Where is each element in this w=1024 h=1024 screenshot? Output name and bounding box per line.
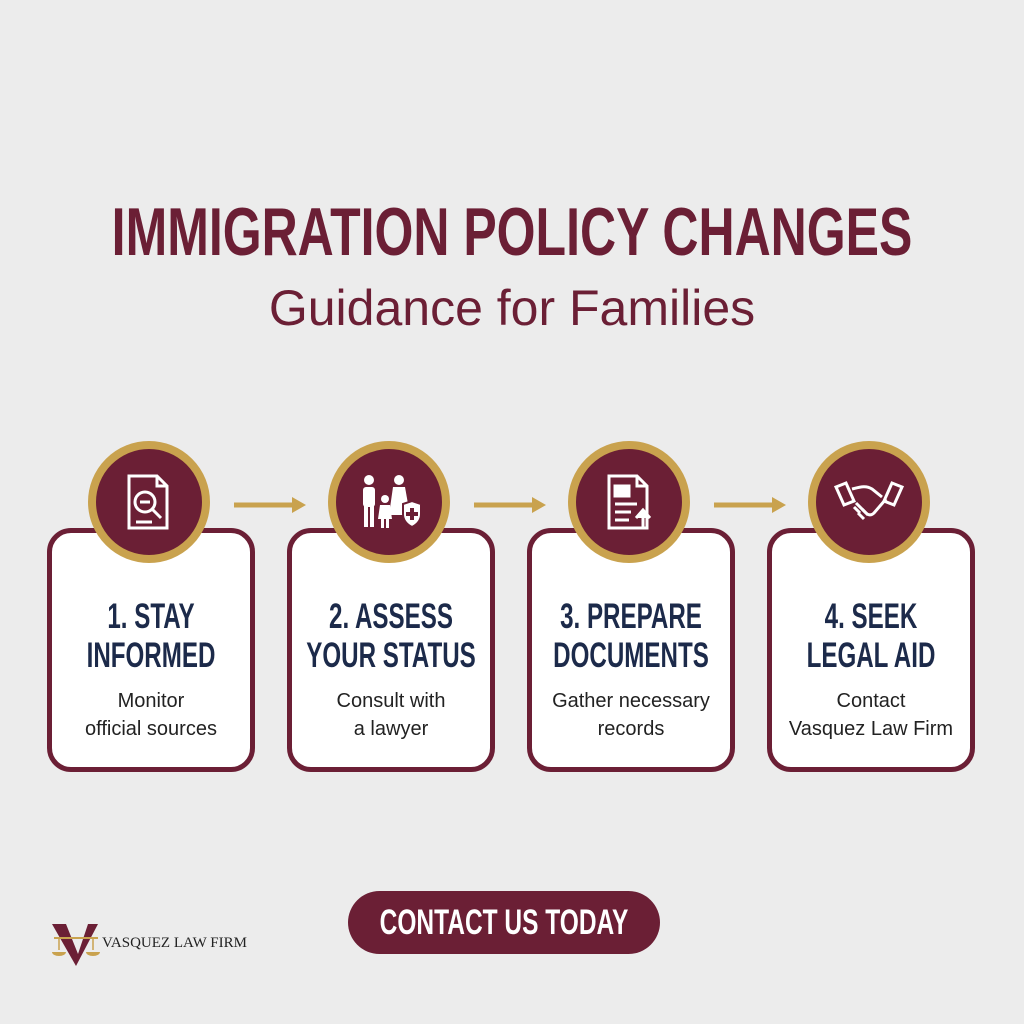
panel: step 4: Vasquez Law Firm — [789, 718, 953, 740]
button: contact us today: CONTACT US TODAY — [380, 903, 628, 942]
panel: step 4: 4. SEEK — [825, 597, 917, 636]
panel: step 4 — [767, 528, 975, 772]
panel: step 4: LEGAL AID — [807, 636, 935, 675]
arrow 3 — [714, 497, 786, 513]
panel: step 2: YOUR STATUS — [306, 636, 476, 675]
icon: document upload — [568, 441, 690, 563]
panel: step 1: Monitor — [118, 690, 184, 712]
subtitle: Guidance for Families — [269, 280, 755, 336]
panel: step 1: INFORMED — [87, 636, 215, 675]
arrow 1 — [234, 497, 306, 513]
logo — [52, 924, 247, 966]
panel: step 1: 1. STAY — [107, 597, 195, 636]
panel: step 3: Gather necessary — [552, 690, 710, 712]
panel: step 3: 3. PREPARE — [560, 597, 702, 636]
logo: VASQUEZ LAW FIRM — [102, 935, 247, 951]
panel: step 1: official sources — [85, 718, 217, 740]
icon: handshake — [808, 441, 930, 563]
panel: step 2 — [287, 528, 495, 772]
panel: step 3: records — [598, 718, 664, 740]
panel: step 2: 2. ASSESS — [329, 597, 453, 636]
panel: step 2: Consult with — [337, 690, 445, 712]
button: contact us today — [348, 891, 660, 954]
panel: step 3: DOCUMENTS — [553, 636, 709, 675]
arrow 2 — [474, 497, 546, 513]
panel: step 3 — [527, 528, 735, 772]
title: IMMIGRATION POLICY CHANGES — [112, 194, 912, 270]
icon: family shield — [328, 441, 450, 563]
icon: document search — [88, 441, 210, 563]
panel: step 4: Contact — [837, 690, 905, 712]
panel: step 1 — [47, 528, 255, 772]
panel: step 2: a lawyer — [354, 718, 428, 740]
